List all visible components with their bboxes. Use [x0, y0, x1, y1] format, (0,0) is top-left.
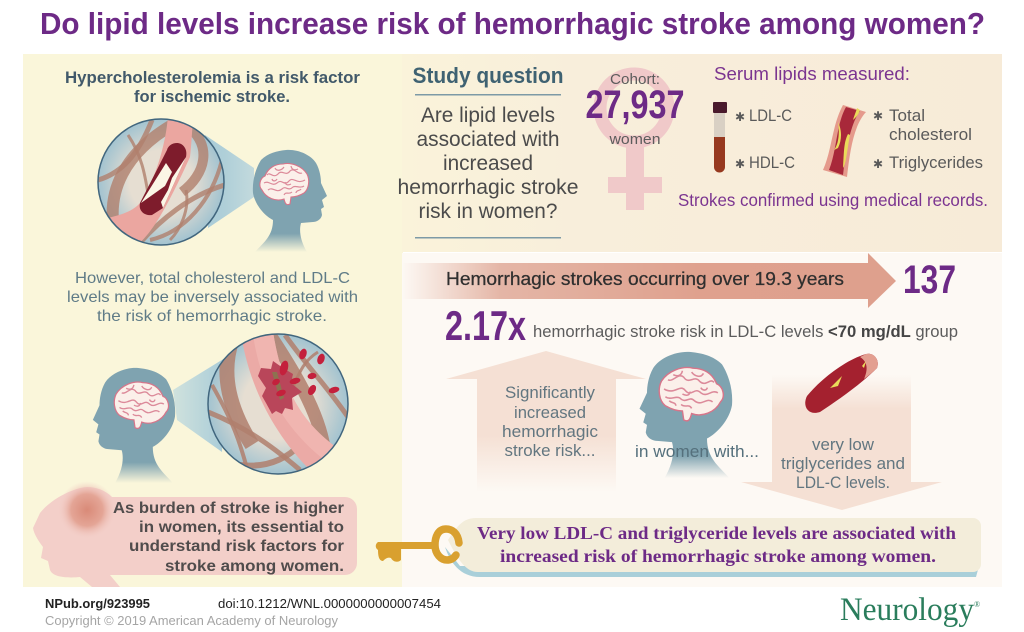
- study question: risk in women?: [418, 200, 558, 223]
- callout: conclusion: Very low LDL-C and triglyceride levels are associated with: [477, 523, 956, 543]
- callout: burden of stroke: understand risk factors for: [129, 538, 344, 555]
- arrow down: very low levels: very low: [812, 435, 875, 454]
- callout: conclusion: [445, 518, 981, 577]
- arrow: hemorrhagic strokes: [402, 253, 896, 308]
- callout: burden of stroke: in women, its essential to: [139, 519, 344, 536]
- cohort: female symbol: Cohort:: [610, 71, 660, 88]
- arrow up: increased risk: hemorrhagic: [502, 422, 598, 441]
- lipid labels: LDL-C: [749, 106, 792, 125]
- callout: conclusion: increased risk of hemorrhagic stroke among women.: [500, 546, 936, 566]
- arrow up: increased risk: Significantly: [505, 383, 595, 402]
- lipid labels: ✱: [873, 157, 883, 171]
- arrow up: increased risk: [446, 351, 646, 492]
- text: however: [67, 270, 358, 325]
- lipid labels: Total: [889, 106, 925, 125]
- heading: hypercholesterolemia: [65, 69, 361, 106]
- text: in women with: in women with...: [635, 442, 759, 461]
- callout: burden of stroke: [33, 481, 357, 587]
- study question: hemorrhagic stroke: [398, 176, 578, 199]
- cohort: female symbol: women: [608, 131, 660, 148]
- lipid labels: [735, 106, 983, 172]
- illustration: ischemic stroke: [98, 115, 327, 252]
- panel: results background: [402, 253, 1002, 587]
- illustration: head with brain: [640, 352, 732, 478]
- callout: burden of stroke: stroke among women.: [165, 558, 344, 575]
- study question: Are lipid levels: [421, 104, 555, 127]
- number: 137: 137: [903, 258, 956, 302]
- arrow down: very low levels: LDL-C levels.: [796, 473, 890, 492]
- study question: Study question: [412, 63, 564, 88]
- study question: [398, 63, 578, 238]
- logo: Neurology: Neurology: [840, 592, 974, 628]
- lipid labels: cholesterol: [889, 125, 972, 144]
- text: however: levels may be inversely associated with: [67, 289, 358, 306]
- illustration: hemorrhagic stroke: [93, 325, 350, 483]
- title: Do lipid levels increase risk of hemorrhagic stroke among women?: [40, 6, 985, 41]
- cohort: female symbol: [586, 71, 684, 210]
- arrow down: very low levels: [741, 354, 942, 510]
- study question: increased: [443, 152, 533, 175]
- panel: left background: [23, 54, 403, 587]
- footer: citation: [45, 597, 441, 628]
- icon: blood tube: [713, 102, 727, 173]
- lipid labels: ✱: [735, 110, 745, 124]
- heading: hypercholesterolemia: for ischemic stroke.: [134, 88, 290, 106]
- callout: burden of stroke: As burden of stroke is higher: [113, 500, 344, 517]
- arrow down: very low levels: triglycerides and: [781, 454, 905, 473]
- arrow up: increased risk: stroke risk...: [504, 441, 596, 460]
- text: however: the risk of hemorrhagic stroke.: [97, 308, 327, 325]
- footer: citation: doi:10.1212/WNL.0000000000007454: [218, 597, 441, 611]
- icon: key: [376, 529, 459, 562]
- heading: hypercholesterolemia: Hypercholesterolemia is a risk factor: [65, 69, 361, 87]
- text: strokes confirmed: Strokes confirmed using medical records.: [678, 190, 988, 210]
- arrow up: increased risk: increased: [514, 403, 586, 422]
- text: however: However, total cholesterol and LDL-C: [75, 270, 350, 287]
- footer: citation: Copyright © 2019 American Academy of Neurology: [45, 614, 339, 628]
- lipid labels: HDL-C: [749, 153, 795, 172]
- stat: 2.17x: [445, 302, 958, 349]
- arrow: hemorrhagic strokes: Hemorrhagic strokes occurring over 19.3 years: [446, 269, 844, 289]
- stat: 2.17x: 2.17x: [445, 302, 526, 349]
- study question: associated with: [416, 128, 560, 151]
- logo: Neurology: ®: [974, 600, 980, 609]
- lipid labels: ✱: [873, 109, 883, 123]
- icon: artery with plaque: [823, 105, 866, 177]
- lipid labels: ✱: [735, 157, 745, 171]
- cohort: female symbol: 27,937: [586, 83, 684, 127]
- footer: citation: NPub.org/923995: [45, 597, 150, 611]
- stat: 2.17x: hemorrhagic stroke risk in LDL-C levels <70 mg/dL group: [533, 323, 958, 341]
- lipid labels: Triglycerides: [889, 153, 983, 172]
- heading: serum lipids: Serum lipids measured:: [714, 63, 910, 84]
- panel: study design background: [402, 54, 1002, 252]
